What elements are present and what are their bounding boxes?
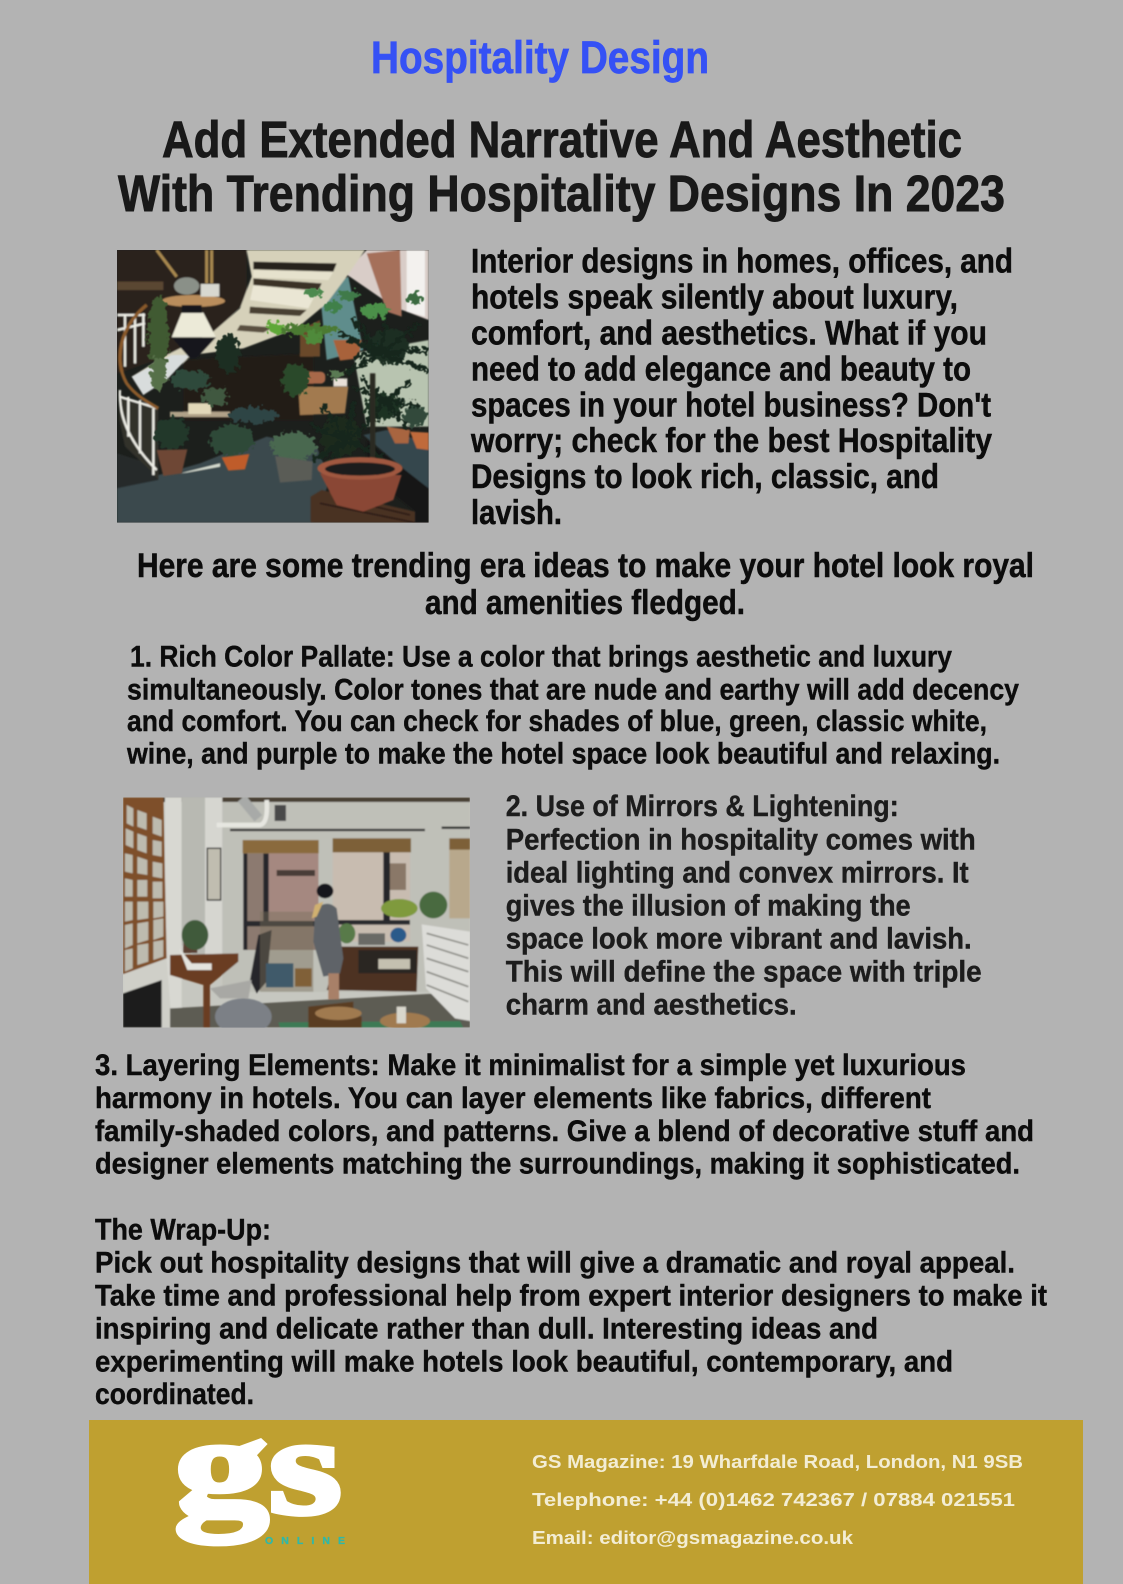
point 1: rich color palette: 1. Rich Color Pallate: Use a color that brings aesthetic and luxury [130,641,952,674]
intro paragraph: worry; check for the best Hospitality [470,422,992,460]
title: With Trending Hospitality Designs In 2023 [118,165,1005,222]
intro paragraph: need to add elegance and beauty to [471,350,971,388]
point 2: mirrors and lighting: gives the illusion of making the [506,889,911,922]
point 1: rich color palette: and comfort. You can check for shades of blue, green, classic white, [127,705,987,738]
point 3: layering elements: harmony in hotels. You can layer elements like fabrics, different [95,1082,931,1115]
point 2: mirrors and lighting: Perfection in hospitality comes with [506,823,976,856]
point 2: mirrors and lighting: charm and aesthetics. [506,988,797,1021]
centered lead-in text [137,547,1034,622]
title: Add Extended Narrative And Aesthetic [162,111,962,168]
the wrap-up: experimenting will make hotels look beautiful, contemporary, and [95,1345,953,1378]
the wrap-up: The Wrap-Up: [95,1213,271,1246]
contact details: GS Magazine: 19 Wharfdale Road, London, N1 9SB [532,1451,1023,1472]
point 1: rich color palette [126,641,1019,770]
point 2: mirrors and lighting: This will define the space with triple [506,955,982,988]
foliage masses [148,289,428,470]
point 3: layering elements: designer elements matching the surroundings, making it sophisticated. [95,1147,1020,1180]
the wrap-up: Pick out hospitality designs that will give a dramatic and royal appeal. [95,1246,1015,1279]
point 2: mirrors and lighting: ideal lighting and convex mirrors. It [506,856,969,889]
logo: gs online: ONLINE [265,1535,345,1547]
intro paragraph: spaces in your hotel business? Don't [471,386,991,424]
intro paragraph [470,243,1013,532]
photo: woman in loft living room [123,797,470,1035]
point 1: rich color palette: wine, and purple to make the hotel space look beautiful and relaxing. [126,737,1000,770]
point 1: rich color palette: simultaneously. Color tones that are nude and earthy will add decency [127,673,1019,706]
intro paragraph: Designs to look rich, classic, and [471,458,939,496]
intro paragraph: comfort, and aesthetics. What if you [471,314,987,352]
photo: spiral staircase with plants [117,250,429,523]
intro paragraph: lavish. [471,494,562,532]
point 2: mirrors and lighting [506,790,982,1021]
the wrap-up [95,1213,1047,1411]
the wrap-up: Take time and professional help from expert interior designers to make it [95,1279,1047,1312]
kicker heading: Hospitality Design: Hospitality Design [371,32,709,83]
title [118,111,1005,222]
intro paragraph: hotels speak silently about luxury, [471,279,958,317]
point 2: mirrors and lighting: space look more vibrant and lavish. [506,922,972,955]
centered lead-in text: and amenities fledged. [425,584,745,622]
point 3: layering elements: family-shaded colors, and patterns. Give a blend of decorative stuff and [95,1115,1034,1148]
contact details [532,1451,1023,1548]
contact details: Email: editor@gsmagazine.co.uk [532,1527,854,1548]
the wrap-up: coordinated. [95,1378,254,1411]
point 3: layering elements: 3. Layering Elements: Make it minimalist for a simple yet luxurious [95,1049,966,1082]
footer band [89,1389,1083,1584]
intro paragraph: Interior designs in homes, offices, and [471,243,1013,281]
the wrap-up: inspiring and delicate rather than dull. Interesting ideas and [95,1312,878,1345]
point 3: layering elements [95,1049,1034,1180]
point 2: mirrors and lighting: 2. Use of Mirrors & Lightening: [506,790,899,823]
logo: gs online: gs [174,1389,342,1544]
contact details: Telephone: +44 (0)1462 742367 / 07884 021551 [532,1489,1015,1510]
